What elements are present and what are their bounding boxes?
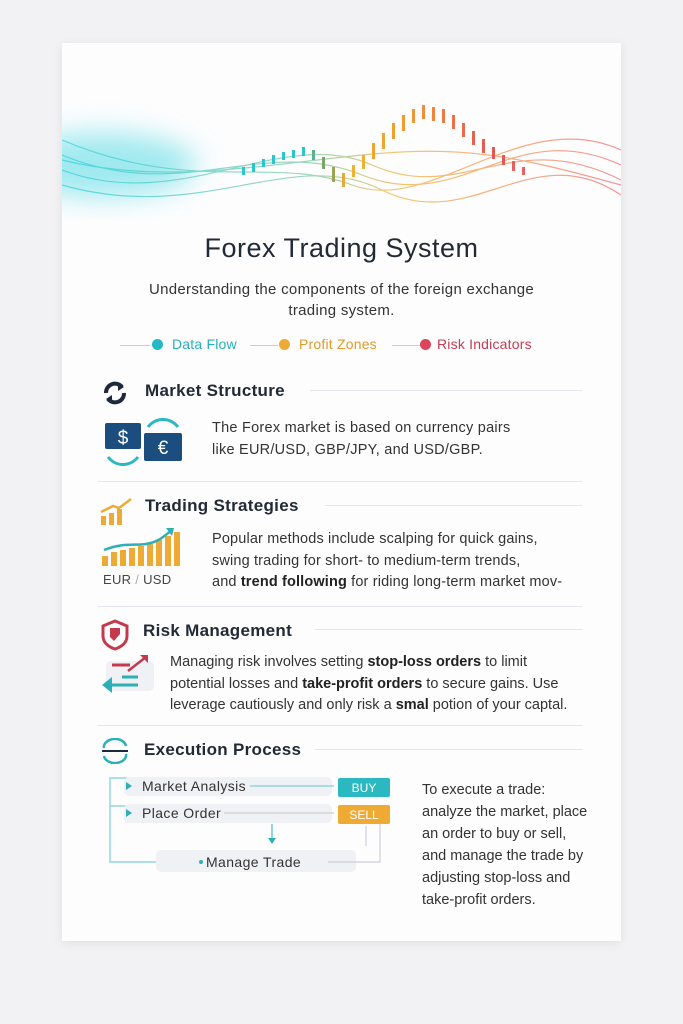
text: potential losses and take-profit orders to secure gains. Use bbox=[170, 676, 558, 692]
legend: Risk Indicators bbox=[437, 336, 532, 352]
heading: Risk Management bbox=[143, 621, 292, 640]
icon: arrows bbox=[102, 655, 154, 693]
text: an order to buy or sell, bbox=[422, 826, 566, 842]
text: Managing risk involves setting stop-loss orders to limit bbox=[170, 654, 527, 670]
text: analyze the market, place bbox=[422, 804, 587, 820]
text: swing trading for short- to medium-term trends, bbox=[212, 552, 520, 568]
text: The Forex market is based on currency pairs bbox=[212, 420, 510, 436]
text: and manage the trade by bbox=[422, 848, 583, 864]
icon: cycle bbox=[102, 738, 128, 764]
header: candlestick wave bbox=[62, 105, 621, 216]
text: like EUR/USD, GBP/JPY, and USD/GBP. bbox=[212, 442, 483, 458]
title: Forex Trading System bbox=[204, 233, 479, 263]
flow diagram: Market Analysis bbox=[142, 778, 246, 794]
flow diagram: SELL bbox=[349, 808, 379, 822]
icon: exchange bbox=[104, 382, 126, 404]
flow diagram bbox=[109, 777, 390, 872]
label: EUR/USD: EUR / USD bbox=[103, 572, 171, 587]
icon: currency: $ bbox=[118, 428, 129, 449]
subtitle bbox=[149, 281, 534, 319]
heading: Market Structure bbox=[145, 381, 285, 400]
icon: currency: € bbox=[158, 438, 169, 459]
flow diagram: Manage Trade bbox=[206, 854, 301, 870]
icon: chart bbox=[102, 528, 180, 566]
icon: currency bbox=[105, 418, 182, 466]
section: execution process bbox=[102, 738, 587, 908]
text bbox=[422, 782, 587, 908]
flow diagram: BUY bbox=[352, 781, 376, 795]
text: and trend following for riding long-term market mov- bbox=[212, 574, 562, 590]
text: To execute a trade: bbox=[422, 782, 545, 798]
icon: small bars bbox=[100, 498, 132, 525]
icon: shield bbox=[102, 619, 128, 651]
text: adjusting stop-loss and bbox=[422, 870, 570, 886]
section: trading strategies bbox=[100, 496, 582, 590]
section: risk management bbox=[102, 619, 582, 713]
text bbox=[212, 420, 510, 458]
section: market structure bbox=[104, 381, 582, 466]
legend: Profit Zones bbox=[299, 336, 377, 352]
legend: Data Flow bbox=[172, 336, 237, 352]
heading: Execution Process bbox=[144, 740, 301, 759]
flow diagram: Place Order bbox=[142, 805, 221, 821]
subtitle: Understanding the components of the foreign exchange bbox=[149, 281, 534, 298]
text: take-profit orders. bbox=[422, 892, 536, 908]
text bbox=[212, 531, 562, 590]
legend bbox=[120, 336, 532, 352]
text: leverage cautiously and only risk a smal potion of your captal. bbox=[170, 697, 567, 713]
subtitle: trading system. bbox=[288, 302, 395, 319]
text bbox=[170, 654, 567, 713]
text: Popular methods include scalping for quick gains, bbox=[212, 531, 538, 547]
heading: Trading Strategies bbox=[145, 496, 299, 515]
